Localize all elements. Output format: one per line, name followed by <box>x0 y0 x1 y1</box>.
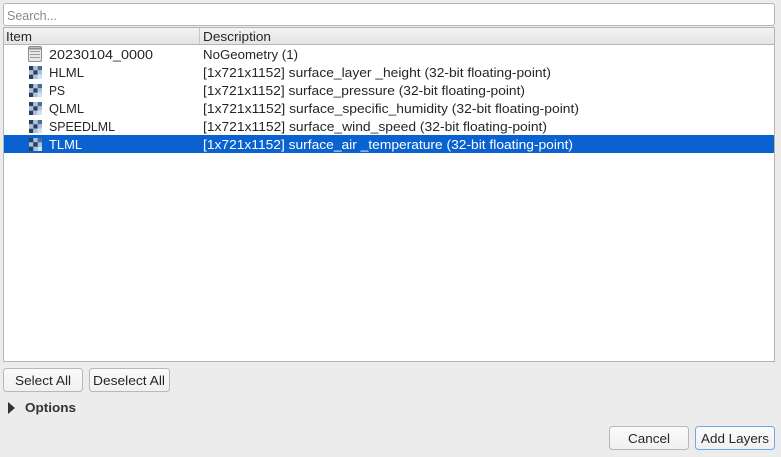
button: Select All <box>4 368 82 392</box>
row: PS <box>29 83 525 98</box>
row: TLML (selected): [1x721x1152] surface_air _temperature (32-bit floating-point) <box>203 137 573 152</box>
search box: Search... <box>7 8 57 23</box>
table header: Description <box>203 29 271 44</box>
icon: raster <box>29 66 42 79</box>
options expander: Options <box>25 400 76 415</box>
button: Cancel: Cancel <box>628 431 670 446</box>
row: QLML: QLML <box>49 101 84 116</box>
row: QLML: [1x721x1152] surface_specific_humidity (32-bit floating-point) <box>203 101 579 116</box>
button: Deselect All <box>90 368 170 392</box>
row: HLML <box>29 65 551 80</box>
row: SPEEDLML: SPEEDLML <box>49 119 115 134</box>
icon: raster <box>29 138 42 151</box>
table header <box>4 28 774 44</box>
button: Add Layers: Add Layers <box>701 431 770 446</box>
row: PS: [1x721x1152] surface_pressure (32-bit floating-point) <box>203 83 525 98</box>
selected row highlight <box>4 135 774 153</box>
row: 20230104_0000: NoGeometry (1) <box>203 47 298 62</box>
row: HLML: [1x721x1152] surface_layer _height (32-bit floating-point) <box>203 65 551 80</box>
row: QLML <box>29 101 579 116</box>
button: Deselect All: Deselect All <box>93 373 165 388</box>
row: HLML: HLML <box>49 65 84 80</box>
row: TLML (selected) <box>29 137 573 152</box>
icon: raster <box>29 102 42 115</box>
row: 20230104_0000 <box>28 46 298 62</box>
button: Select All: Select All <box>15 373 71 388</box>
button: Cancel <box>610 426 688 450</box>
button: Add Layers <box>696 426 774 450</box>
row: PS: PS <box>49 83 65 98</box>
table header: Item <box>6 29 32 44</box>
layer table <box>4 28 774 362</box>
search box <box>4 4 774 26</box>
icon: raster <box>29 120 42 133</box>
row: SPEEDLML <box>29 119 547 134</box>
row: 20230104_0000: 20230104_0000 <box>49 47 153 62</box>
row: SPEEDLML: [1x721x1152] surface_wind_speed (32-bit floating-point) <box>203 119 547 134</box>
icon: table <box>28 46 42 62</box>
icon: triangle <box>8 402 15 414</box>
row: TLML (selected): TLML <box>49 137 82 152</box>
icon: raster <box>29 84 42 97</box>
